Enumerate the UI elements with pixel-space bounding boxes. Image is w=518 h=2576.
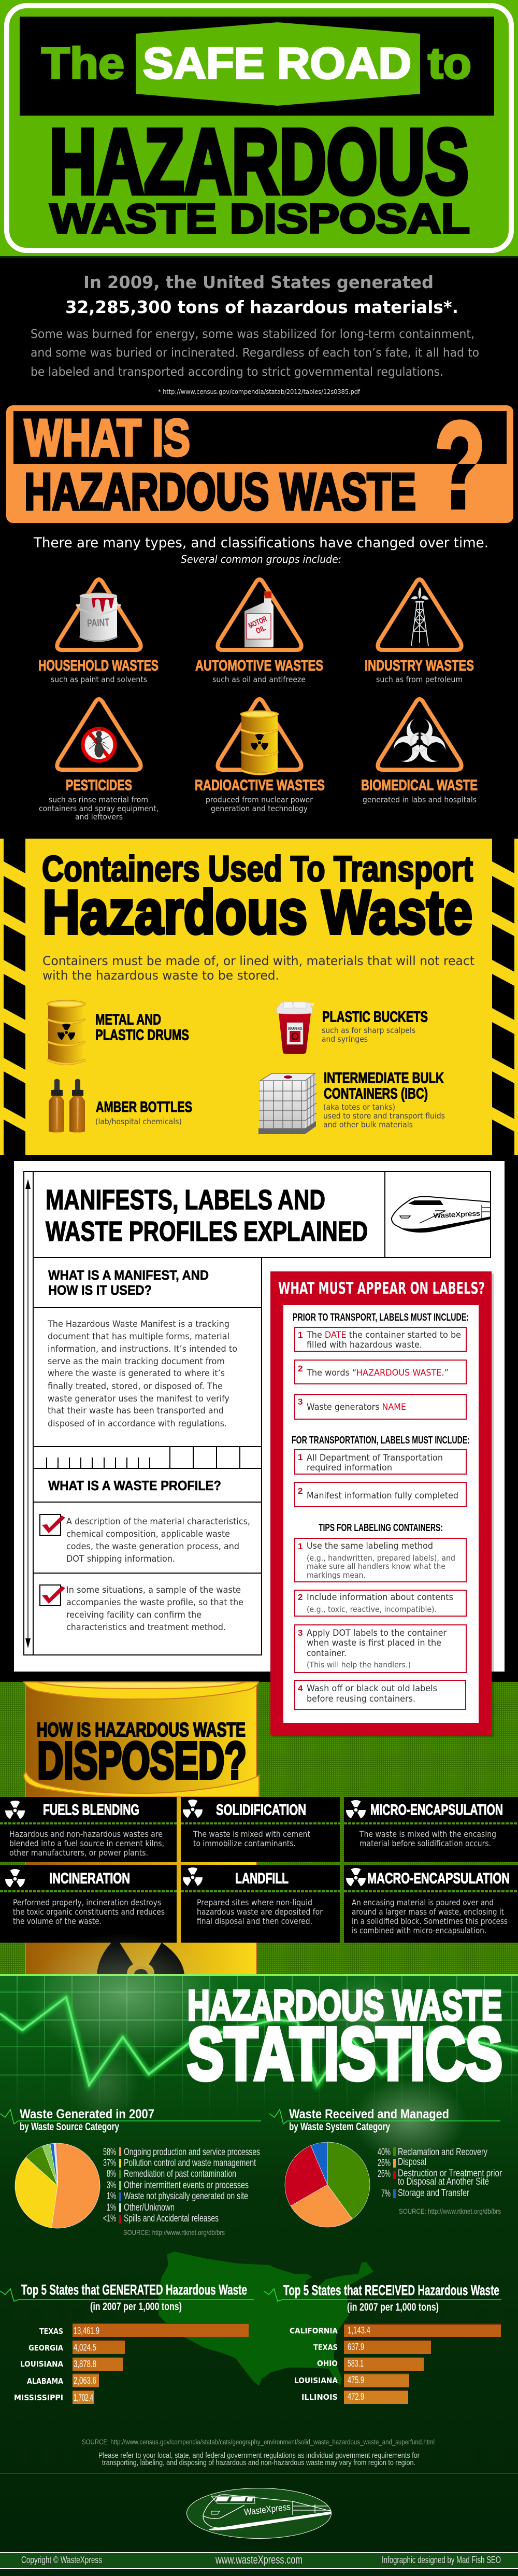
intro text block: * http://www.census.gov/compendia/statab/2012/tables/12s0385.pdf	[158, 388, 361, 395]
pie chart: waste source	[15, 2143, 100, 2228]
panel: landfill	[181, 1865, 340, 1943]
icon: plastic bucket	[277, 1002, 314, 1054]
box: tip 2: Include information about contents	[307, 1592, 453, 1603]
icon: paint can	[76, 593, 121, 642]
bar chart: states generated: TEXAS	[39, 2327, 63, 2336]
text: types intro: There are many types, and classifications have changed over time.	[33, 535, 488, 551]
bar chart: states received: LOUISIANA	[294, 2376, 338, 2385]
item: profile description: A description of the material characteristics,	[66, 1517, 250, 1527]
caption	[206, 795, 313, 813]
heading: manifests labels profiles: MANIFESTS, LABELS AND	[46, 1184, 325, 1215]
text: The waste is mixed with cement	[193, 1829, 310, 1839]
chart heading: top 5 received	[264, 2282, 501, 2313]
chart heading: waste generated	[0, 2107, 261, 2133]
legend: waste source: Pollution control and waste management	[124, 2158, 256, 2169]
legend: waste source: Other/Unknown	[124, 2202, 175, 2213]
bar chart: states received: 472.9	[348, 2391, 364, 2402]
heading: LANDFILL	[235, 1870, 289, 1887]
heading: how is hazardous waste disposed: DISPOSED?	[37, 1732, 247, 1790]
footer bar	[0, 2552, 518, 2576]
text: Prepared sites where non-liquid	[197, 1898, 312, 1907]
panel: containers	[0, 839, 518, 1155]
bar chart: states generated: 2,063.6	[74, 2375, 96, 2386]
box: tip 3: when waste is first placed in the	[307, 1638, 441, 1648]
bar chart: states generated: LOUISIANA	[20, 2359, 63, 2369]
bar chart: states received: 583.1	[348, 2358, 364, 2369]
label: amber bottles: (lab/hospital chemicals)	[95, 1117, 182, 1126]
group: household wastes	[38, 579, 159, 684]
text: manifest explanation: document that has multiple forms, material	[48, 1332, 229, 1342]
text: Performed properly, incineration destroys	[13, 1898, 161, 1907]
icon: motor oil bottle	[244, 591, 274, 647]
icon: question mark: ?	[434, 395, 486, 534]
panel: title sign	[0, 0, 518, 256]
group: radioactive wastes	[195, 699, 325, 813]
text: types intro: Several common groups include:	[181, 553, 341, 565]
title: The Safe Road to: SAFE ROAD	[143, 39, 411, 88]
legend: waste system: 40%	[378, 2147, 391, 2158]
text: other manufacturers, or power plants.	[9, 1848, 148, 1858]
text: manifest explanation: The Hazardous Waste Manifest is a tracking	[47, 1319, 229, 1329]
item: profile description	[40, 1515, 250, 1564]
box: tip 3: (This will help the handlers.)	[307, 1660, 411, 1669]
box: tip 3: container.	[307, 1648, 347, 1659]
legend: waste source: 8%	[107, 2169, 116, 2179]
intro text block	[31, 272, 479, 395]
box: date: 1	[298, 1330, 303, 1340]
text	[197, 1898, 323, 1926]
box: words: 2	[298, 1364, 303, 1374]
text: manifest explanation: disposed of in accordance with regulations.	[48, 1419, 227, 1429]
text: source and disclaimer: Please refer to your local, state, and federal government regulations as individual government requirements for	[98, 2451, 420, 2460]
box: manifest info: 2	[298, 1486, 303, 1496]
icon: radioactive barrel	[240, 711, 279, 775]
text: containers intro: with the hazardous waste to be stored.	[42, 968, 279, 983]
group: pesticides	[39, 699, 159, 822]
legend: waste system: Disposal	[398, 2157, 426, 2168]
heading: what is a manifest	[48, 1267, 209, 1298]
legend: waste system: 26%	[378, 2169, 391, 2179]
panel: manifests document	[14, 1161, 505, 1672]
box: DOT info	[295, 1450, 466, 1474]
box: tip 3: Apply DOT labels to the container	[307, 1628, 447, 1638]
box: words	[295, 1360, 466, 1384]
panel: solidification	[181, 1797, 340, 1862]
text: manifest explanation: information, and instructions. It’s intended to	[48, 1344, 237, 1354]
label: industry wastes: INDUSTRY WASTES	[365, 657, 474, 674]
panel: incineration	[0, 1865, 177, 1943]
heading: how is hazardous waste disposed	[37, 1719, 247, 1790]
text: manifest explanation	[47, 1319, 237, 1429]
legend: waste system: 26%	[378, 2158, 391, 2169]
panel: micro-encapsulation	[344, 1797, 518, 1862]
icon: radiation symbol on barrel	[97, 1943, 184, 1974]
chart line: pulse trace	[0, 1997, 518, 2085]
icon: train logo: WasteXpress	[433, 1209, 481, 1220]
text: manifest explanation: serve as the main tracking document from	[48, 1356, 225, 1367]
box: tip 1: 1	[298, 1541, 303, 1551]
intro text block: 32,285,300 tons of hazardous materials*.	[65, 297, 458, 317]
label: household wastes: HOUSEHOLD WASTES	[38, 657, 159, 674]
box: tip 1: markings mean.	[307, 1570, 366, 1580]
text: An encasing material is poured over and	[352, 1898, 494, 1907]
box: DOT info: required information	[307, 1463, 392, 1473]
box: tip 1: Use the same labeling method	[307, 1541, 433, 1551]
icon: radiation	[4, 1801, 26, 1820]
text	[13, 1898, 165, 1926]
legend: waste source: 58%	[103, 2147, 116, 2158]
intro text block: Some was burned for energy, some was stabilized for long-term containment,	[31, 328, 474, 341]
box: tip 3	[295, 1625, 466, 1673]
panel: what is hazardous waste	[6, 405, 513, 523]
panel: macro-encapsulation	[344, 1865, 518, 1943]
text: The waste is mixed with the encasing	[359, 1829, 496, 1839]
item: profile sample: characteristics and treatment method.	[66, 1622, 226, 1633]
caption: such as paint and solvents	[51, 675, 147, 684]
legend: waste source: 1%	[107, 2191, 116, 2202]
icon: paint can: PAINT	[87, 617, 110, 629]
icon: radiation	[182, 1800, 204, 1819]
chart heading: waste generated: by Waste Source Category	[20, 2121, 119, 2133]
legend: waste system: Reclamation and Recovery	[398, 2147, 487, 2158]
text: Hazardous and non-hazardous wastes are	[9, 1829, 163, 1839]
bar chart: states generated	[14, 2323, 249, 2404]
chart heading: top 5 generated: Top 5 States that GENERATED Hazardous Waste	[21, 2282, 247, 2298]
label: intermediate bulk containers: INTERMEDIATE BULK	[324, 1070, 444, 1086]
box: name: 3	[298, 1397, 303, 1407]
bar chart: states received: OHIO	[317, 2359, 338, 2368]
panel: statistics background	[0, 1933, 518, 2576]
illustration: yellow barrel	[24, 1682, 259, 1974]
text	[9, 1829, 164, 1858]
text: source and disclaimer	[82, 2438, 435, 2467]
box: tip 4	[295, 1680, 466, 1709]
legend: waste source: Spills and Accidental releases	[124, 2213, 219, 2224]
chart heading: top 5 received: (in 2007 per 1,000 tons)	[347, 2301, 439, 2313]
intro text block: be labeled and transported according to strict governmental regulations.	[31, 365, 443, 379]
icon: IBC tote	[258, 1073, 316, 1134]
icon: motor oil bottle: OIL	[254, 624, 267, 635]
item: profile description: DOT shipping information.	[66, 1554, 175, 1564]
label: pesticides: PESTICIDES	[66, 777, 132, 794]
box: tip 2: 2	[298, 1592, 303, 1602]
title: Waste Disposal: WASTE DISPOSAL	[50, 195, 470, 242]
label: intermediate bulk containers: (aka totes or tanks)	[323, 1102, 395, 1112]
text: manifest explanation: finally treated, stored, or disposed of. The	[48, 1381, 223, 1392]
label: radioactive wastes: RADIOACTIVE WASTES	[195, 777, 325, 794]
item: profile sample: In some situations, a sample of the waste	[66, 1585, 241, 1595]
caption: containers and spray equipment,	[39, 804, 159, 813]
text: is combined with micro-encapsulation.	[352, 1926, 486, 1935]
chart heading: waste received: Waste Received and Managed	[289, 2107, 449, 2121]
caption: such as rinse material from	[49, 795, 148, 804]
icon: radiation	[345, 1868, 367, 1887]
caption: generation and technology	[211, 804, 308, 813]
text: manifest explanation: waste generator uses the manifest to verify	[48, 1394, 229, 1404]
box: tip 3: 3	[298, 1628, 303, 1638]
title: The Safe Road to: The	[41, 39, 124, 88]
text: types intro	[33, 535, 488, 565]
box: tip 4: before reusing containers.	[307, 1694, 415, 1704]
label: plastic buckets: such as for sharp scalpels	[322, 1026, 415, 1035]
bar chart: states generated: 3,878.8	[74, 2359, 96, 2369]
text: manifest explanation: that their waste has been transported and	[48, 1406, 224, 1416]
caption: produced from nuclear power	[206, 795, 313, 804]
box: DOT info: 1	[298, 1452, 303, 1462]
label: plastic buckets	[322, 1009, 428, 1044]
bar chart: states generated: GEORGIA	[28, 2343, 63, 2353]
caption: and leftovers	[75, 812, 123, 822]
icon: plastic bucket: WARNING	[288, 1027, 302, 1031]
icon: biohazard	[394, 717, 445, 762]
caption: generated in labs and hospitals	[363, 795, 477, 804]
box: date: filled with hazardous waste.	[307, 1340, 422, 1350]
box: tip 4: Wash off or black out old labels	[307, 1683, 437, 1694]
box: tip 2: (e.g., toxic, reactive, incompatible).	[307, 1605, 437, 1614]
label: metal and plastic drums: METAL AND	[95, 1012, 161, 1028]
icon: question mark: ?	[434, 395, 486, 534]
label: plastic buckets: and syringes	[322, 1035, 368, 1044]
box: tip 4: 4	[298, 1683, 303, 1693]
text	[359, 1829, 496, 1848]
bar chart: states received: 1,143.4	[348, 2325, 370, 2336]
item: profile sample: receiving facility can confirm the	[66, 1610, 202, 1620]
legend: waste system: Storage and Transfer	[398, 2188, 470, 2199]
bar chart: states received: 637.9	[348, 2342, 364, 2352]
legend: waste source: 3%	[107, 2180, 116, 2191]
heading: how is hazardous waste disposed: HOW IS HAZARDOUS WASTE	[37, 1719, 246, 1741]
subheading: tips: TIPS FOR LABELING CONTAINERS:	[319, 1522, 443, 1534]
label: amber bottles	[95, 1099, 192, 1126]
chart heading: waste generated: Waste Generated in 2007	[20, 2107, 154, 2121]
pie chart: waste system	[285, 2142, 370, 2227]
text: source and disclaimer: SOURCE: http://www.census.gov/compendia/statab/cats/geography_environment/solid_waste_hazardous_waste_and_superfund.html	[82, 2438, 435, 2446]
label: plastic buckets: PLASTIC BUCKETS	[322, 1009, 428, 1025]
box: tip 1	[295, 1538, 466, 1582]
label: metal and plastic drums: PLASTIC DRUMS	[95, 1027, 189, 1044]
item: profile sample: accompanies the waste profile, so that the	[66, 1597, 243, 1608]
text: source and disclaimer: transporting, labeling, and disposing of hazardous and non-hazardous waste may vary from region to region.	[102, 2458, 415, 2467]
footer bar: www.wasteXpress.com	[215, 2553, 303, 2566]
panel: fuels blending	[0, 1797, 177, 1862]
text: material before solidification occurs.	[359, 1838, 491, 1848]
label: intermediate bulk containers: used to store and transport fluids	[323, 1111, 445, 1121]
icon: radiation	[345, 1800, 367, 1819]
icon: train logo	[392, 1197, 491, 1232]
text	[352, 1898, 508, 1935]
intro text block: and some was buried or incinerated. Regardless of each ton’s fate, it all had to	[31, 346, 479, 360]
label: automotive wastes: AUTOMOTIVE WASTES	[195, 657, 323, 674]
heading: INCINERATION	[49, 1870, 130, 1887]
label: metal and plastic drums	[95, 1012, 189, 1044]
heading: FUELS BLENDING	[43, 1802, 139, 1818]
label: intermediate bulk containers: and other bulk materials	[323, 1120, 413, 1129]
legend: waste source: Waste not physically generated on site	[124, 2191, 248, 2202]
bar chart: states generated: 4,024.5	[74, 2342, 96, 2353]
icon: radiation	[4, 1869, 26, 1888]
icon: oil derrick	[411, 587, 429, 646]
icon: no-ant sign	[83, 728, 115, 761]
text: the volume of the waste.	[13, 1916, 102, 1926]
legend: waste source	[103, 2147, 260, 2237]
legend: waste source: Remediation of past contamination	[124, 2169, 236, 2179]
title: The Safe Road to: to	[428, 39, 471, 88]
text: containers intro: Containers must be made of, or lined with, materials that will not react	[42, 954, 474, 968]
legend: waste system: to Disposal at Another Site	[398, 2176, 489, 2187]
icon: amber bottles	[49, 1079, 85, 1133]
legend: waste source: Ongoing production and service processes	[124, 2147, 260, 2158]
title: The Safe Road to	[41, 39, 471, 88]
text: hazardous waste are deposited for	[197, 1907, 323, 1917]
box: words: The words “HAZARDOUS WASTE.”	[306, 1368, 449, 1378]
box: tip 2	[295, 1590, 466, 1616]
heading: what is a waste profile: WHAT IS A WASTE PROFILE?	[48, 1478, 221, 1493]
heading: SOLIDIFICATION	[216, 1802, 306, 1818]
label: biomedical waste: BIOMEDICAL WASTE	[361, 777, 478, 794]
box: name	[295, 1395, 466, 1419]
chart heading: waste received	[269, 2107, 500, 2133]
icon: question mark	[437, 419, 482, 509]
group: industry wastes	[365, 579, 474, 684]
heading: manifests labels profiles: WASTE PROFILES EXPLAINED	[46, 1216, 368, 1247]
caption	[39, 795, 159, 822]
item: profile description: codes, the waste generation process, and	[66, 1541, 239, 1552]
box: name: Waste generators NAME	[307, 1402, 406, 1412]
box: manifest info: Manifest information fully completed	[307, 1491, 458, 1501]
bar chart: states received: 475.9	[348, 2375, 364, 2385]
icon: metal drum	[47, 1000, 85, 1065]
text: final disposal and then covered.	[197, 1916, 312, 1926]
text: containers intro	[42, 954, 474, 983]
panel: what must appear on labels	[270, 1271, 494, 1737]
item: profile sample	[40, 1585, 243, 1633]
legend: waste source: SOURCE: http://www.rtknet.org/db/brs	[123, 2228, 225, 2237]
map: USA	[159, 2252, 373, 2386]
chart heading: top 5 generated: (in 2007 per 1,000 tons)	[90, 2301, 182, 2313]
item: profile description: chemical composition, applicable waste	[66, 1529, 230, 1539]
icon: radiation	[182, 1867, 204, 1887]
chart heading: top 5 generated	[0, 2282, 254, 2313]
bar chart: states generated: MISSISSIPPI	[14, 2393, 63, 2402]
chart heading: waste received: by Waste System Category	[289, 2121, 390, 2133]
box: date: The DATE the container started to be	[306, 1330, 461, 1340]
caption: such as oil and antifreeze	[212, 675, 306, 684]
box: manifest info	[295, 1482, 466, 1507]
bar chart: states generated: 1,702.4	[74, 2393, 93, 2403]
footer bar: Copyright © WasteXpress	[21, 2555, 102, 2565]
label: intermediate bulk containers	[323, 1070, 445, 1129]
box: tip 1: make sure all handlers know what the	[307, 1562, 445, 1571]
bar chart: states received	[290, 2324, 501, 2404]
label: intermediate bulk containers: CONTAINERS (IBC)	[324, 1085, 428, 1102]
group: automotive wastes	[195, 579, 323, 684]
icon: double arrow	[25, 1179, 31, 1648]
text: to immobilize contaminants.	[193, 1838, 296, 1848]
logo: WasteXpress train: WasteXpress	[243, 2501, 291, 2517]
legend: waste system: 7%	[381, 2188, 391, 2199]
box: tip 1: (e.g., handwritten, prepared labels), and	[307, 1553, 455, 1563]
bar chart: states generated: ALABAMA	[27, 2376, 63, 2386]
panel: disposal background	[0, 1682, 518, 1974]
box: DOT info: All Department of Transportation	[307, 1453, 443, 1463]
intro text block: In 2009, the United States generated	[83, 272, 434, 292]
box: date	[295, 1327, 466, 1351]
text: manifest explanation: where the waste is generated to where it’s	[48, 1368, 225, 1379]
heading: what is: WHAT IS	[24, 409, 190, 467]
bar chart: states received: TEXAS	[313, 2343, 338, 2352]
legend: waste source: 37%	[103, 2158, 116, 2169]
bar chart: states received: ILLINOIS	[301, 2393, 338, 2402]
group: biomedical waste	[361, 699, 478, 804]
text: blended into a fuel source in cement kilns,	[9, 1838, 164, 1848]
heading: what is a manifest: HOW IS IT USED?	[48, 1282, 152, 1298]
logo: WasteXpress train	[186, 2488, 332, 2539]
bar chart: states generated: 13,461.9	[74, 2326, 99, 2336]
label: amber bottles: AMBER BOTTLES	[96, 1099, 192, 1115]
caption: such as from petroleum	[376, 675, 463, 684]
legend: waste source: 1%	[107, 2202, 116, 2213]
heading: what is a manifest: WHAT IS A MANIFEST, AND	[48, 1267, 209, 1283]
legend: waste system	[378, 2147, 502, 2215]
legend: waste source: Other intermittent events or processes	[124, 2180, 249, 2191]
text	[193, 1829, 310, 1848]
icon: motor oil bottle: MOTOR	[247, 615, 268, 630]
legend: waste source: <1%	[103, 2213, 116, 2224]
bar chart: states received: CALIFORNIA	[290, 2326, 338, 2336]
heading: manifests labels profiles	[46, 1184, 368, 1247]
text: the toxic organic constituents and reduces	[13, 1907, 165, 1917]
